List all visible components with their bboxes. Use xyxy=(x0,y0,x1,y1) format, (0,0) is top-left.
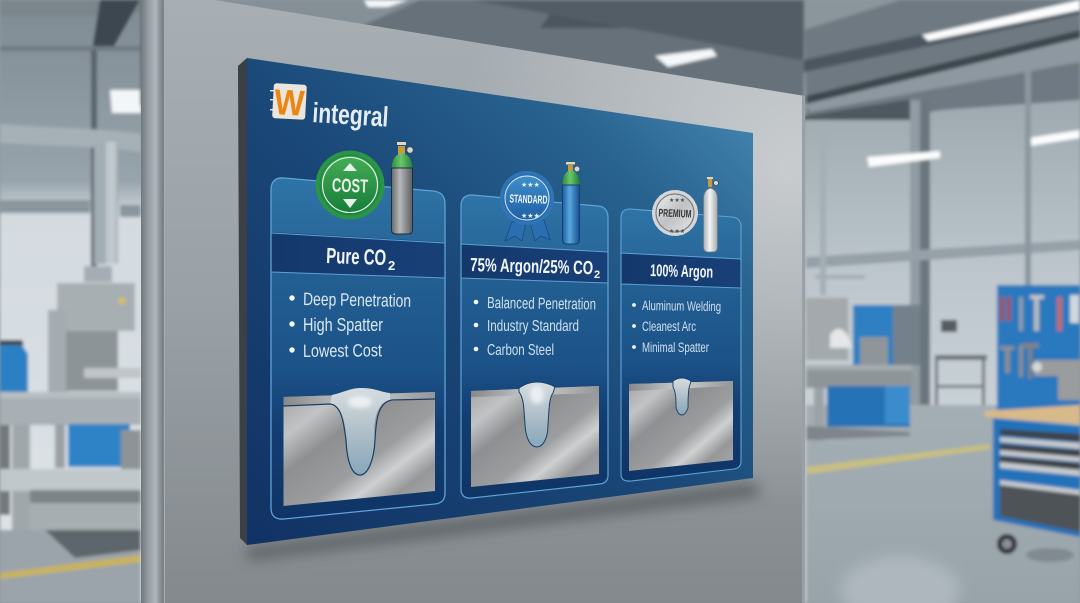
logo: Wintegral: W xyxy=(273,81,305,124)
badge: PREMIUM: ★★★ xyxy=(669,228,685,235)
panel: 75% Argon / 25% CO2 xyxy=(461,162,608,498)
bullet list: Pure CO2: Deep Penetration xyxy=(303,289,411,311)
badge: STANDARD: ★★★ xyxy=(521,181,540,189)
logo: Wintegral xyxy=(270,81,389,133)
heading band: Pure CO2: 2 xyxy=(388,258,395,273)
bullet list: 100% Argon: Minimal Spatter xyxy=(642,340,709,355)
shadow of sign xyxy=(244,482,760,560)
heading band: Pure CO2 xyxy=(271,233,445,278)
heading band: Pure CO2: Pure CO xyxy=(326,243,387,270)
weld cross-section: deep penetration xyxy=(284,388,435,506)
right side of workshop xyxy=(804,0,1080,603)
panel: 100% Argon xyxy=(621,177,741,481)
stainless steel mounting panel xyxy=(141,0,805,603)
icon: argon mix gas cylinder xyxy=(562,162,580,244)
bullet list: Pure CO2 xyxy=(289,289,411,361)
badge: STANDARD xyxy=(502,172,552,241)
icon: argon gas cylinder xyxy=(704,177,718,252)
weld cross-section: balanced penetration xyxy=(471,382,599,487)
left side of workshop xyxy=(0,0,145,603)
heading band: 100% Argon xyxy=(621,253,741,288)
bullet list: 100% Argon: Cleanest Arc xyxy=(642,319,696,334)
logo: Wintegral: integral xyxy=(312,97,389,133)
sign board xyxy=(238,58,753,545)
badge: PREMIUM: PREMIUM xyxy=(658,207,692,221)
icon: CO2 gas cylinder xyxy=(392,142,413,234)
bullet list: Pure CO2: Lowest Cost xyxy=(303,340,382,361)
badge: PREMIUM: ★★★ xyxy=(669,197,685,204)
upper ceiling behind panel xyxy=(140,0,980,105)
bullet list: 100% Argon xyxy=(632,298,721,355)
heading band: 75% Argon / 25% CO2 xyxy=(461,244,608,283)
weld cross-section: shallow penetration xyxy=(629,378,733,471)
bullet list: 75% Argon / 25% CO2 xyxy=(474,295,596,359)
badge: PREMIUM xyxy=(654,192,696,235)
heading band: 100% Argon: 100% Argon xyxy=(650,261,713,282)
bullet list: Pure CO2: High Spatter xyxy=(303,315,383,335)
bullet list: 100% Argon: Aluminum Welding xyxy=(642,298,721,314)
heading band: 75% Argon / 25% CO2: 2 xyxy=(594,269,600,281)
heading band: 75% Argon / 25% CO2: 75% Argon/25% CO xyxy=(470,255,593,279)
badge: COST xyxy=(318,152,382,218)
bullet list: 75% Argon / 25% CO2: Industry Standard xyxy=(487,318,579,335)
badge: STANDARD: ★★★ xyxy=(521,212,540,220)
panel: Pure CO2 xyxy=(271,142,445,519)
bullet list: 75% Argon / 25% CO2: Carbon Steel xyxy=(487,342,554,359)
badge: COST: COST xyxy=(332,175,369,198)
badge: STANDARD: STANDARD xyxy=(509,193,548,207)
bullet list: 75% Argon / 25% CO2: Balanced Penetration xyxy=(487,295,596,314)
